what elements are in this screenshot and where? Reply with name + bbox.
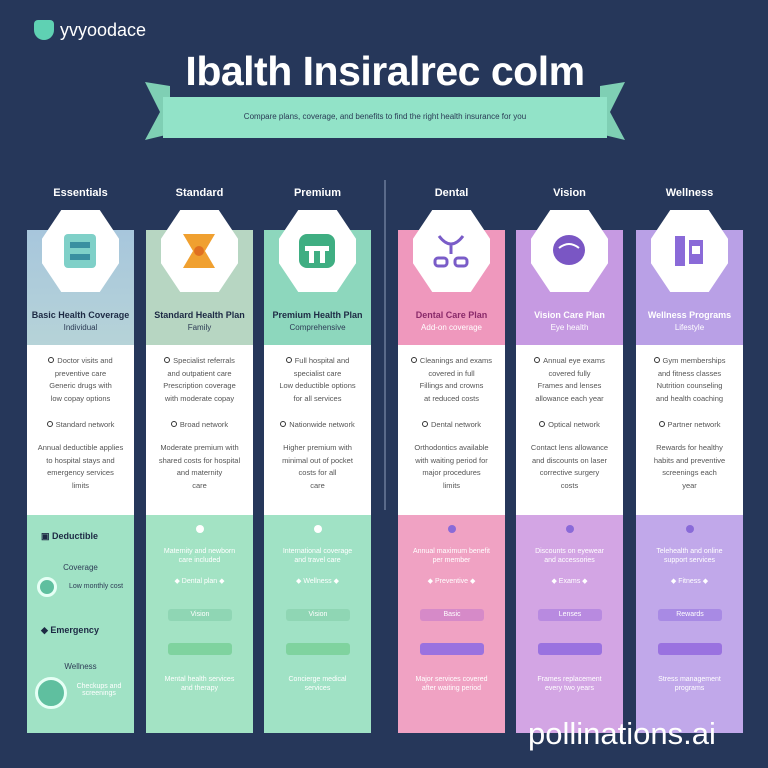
column 5: Discounts on eyewear <box>535 548 604 555</box>
divider <box>384 180 386 510</box>
column 2: Standard Health Plan <box>154 310 245 320</box>
column 1: Coverage <box>63 563 98 572</box>
column 4: covered in full <box>428 368 475 378</box>
column 3: International coverage <box>283 548 352 555</box>
column 5: allowance each year <box>535 394 604 402</box>
column 2: and outpatient care <box>167 368 232 378</box>
column 2: with moderate copay <box>165 394 234 402</box>
column 5: Frames replacement <box>537 676 602 683</box>
column 1: Checkups and screenings <box>77 683 121 697</box>
column 1: Annual deductible applies <box>38 443 123 452</box>
column 6: Wellness Programs <box>648 310 731 320</box>
column 3: Concierge medical <box>288 676 346 683</box>
column 5: corrective surgery <box>540 468 599 477</box>
column 5: and accessories <box>544 557 595 564</box>
column 4: Orthodontics available <box>414 443 489 452</box>
column 5: Annual eye exams <box>543 356 605 365</box>
column 4: Major services covered <box>416 676 487 683</box>
column 2: shared costs for hospital <box>159 456 240 464</box>
column 4: Annual maximum benefit <box>413 548 490 555</box>
column 6: habits and preventive <box>654 456 725 464</box>
column 1: ◆ Emergency <box>41 625 99 635</box>
column 5: covered fully <box>548 368 591 378</box>
column 5 <box>516 187 623 733</box>
column 2: Family <box>188 323 211 332</box>
column 6: screenings each <box>662 468 717 477</box>
column 2: Vision <box>191 611 209 618</box>
column 4: major procedures <box>422 468 481 477</box>
watermark: pollinations.ai <box>528 716 716 751</box>
column 2: Specialist referrals <box>173 356 235 365</box>
column 5: Contact lens allowance <box>531 443 608 452</box>
column 2: Mental health services <box>165 676 234 683</box>
column 6: Gym memberships <box>663 356 725 365</box>
subtitle: Compare plans, coverage, and benefits to find the right health insurance for you <box>244 112 526 121</box>
column 6: Telehealth and online <box>656 548 723 555</box>
column 1: emergency services <box>47 468 114 477</box>
column 4: at reduced costs <box>424 394 479 402</box>
text: Essentials <box>53 187 108 199</box>
column 6: Lifestyle <box>675 323 704 332</box>
column 4: limits <box>443 480 460 490</box>
column 3: care <box>310 480 325 490</box>
column 1: to hospital stays and <box>46 456 115 464</box>
logo <box>34 20 146 40</box>
text: Wellness <box>666 187 713 199</box>
column 4: Dental Care Plan <box>416 310 487 320</box>
text: Dental <box>435 187 468 199</box>
column 4: Dental network <box>431 420 481 429</box>
column 3: minimal out of pocket <box>282 456 353 464</box>
column 2: care included <box>179 557 220 564</box>
column 2: care <box>192 480 207 490</box>
column 5: Vision Care Plan <box>534 310 605 320</box>
column 4: Cleanings and exams <box>420 356 492 365</box>
column 6: programs <box>675 685 704 692</box>
column 3: Comprehensive <box>289 323 346 332</box>
column 6: Partner network <box>668 420 720 429</box>
column 5: Eye health <box>551 323 588 332</box>
column 2: and therapy <box>181 685 218 692</box>
column 6: and health coaching <box>656 394 723 402</box>
column 3: and travel care <box>294 557 341 564</box>
column 2: Prescription coverage <box>163 381 236 390</box>
column 5: Lenses <box>559 611 581 618</box>
column 2 <box>146 187 253 733</box>
column 3 <box>264 187 371 733</box>
text: Vision <box>553 187 586 199</box>
column 4 <box>398 187 505 733</box>
column 1: Individual <box>64 323 97 332</box>
column 3: services <box>305 685 330 692</box>
column 6: support services <box>664 557 715 564</box>
column 6: Nutrition counseling <box>657 381 722 390</box>
column 3: ◆ Wellness ◆ <box>296 578 339 585</box>
column 5: costs <box>561 480 578 490</box>
column 6: year <box>682 480 697 490</box>
column 3: specialist care <box>294 368 341 378</box>
column 1: preventive care <box>55 368 106 378</box>
column 3: for all services <box>294 394 341 402</box>
column 3: Premium Health Plan <box>272 310 363 320</box>
title: Ibalth Insiralrec colm <box>185 48 585 94</box>
column 1: Low monthly cost <box>69 583 123 590</box>
column 2: Maternity and newborn <box>164 548 235 555</box>
column 3: Nationwide network <box>289 420 355 429</box>
ribbon banner <box>145 82 625 140</box>
column 5: Frames and lenses <box>538 381 601 390</box>
column 1 <box>27 187 134 733</box>
column 3: Low deductible options <box>279 381 356 390</box>
column 3: Higher premium with <box>283 443 352 452</box>
column 1: limits <box>72 480 89 490</box>
column 1: low copay options <box>51 394 110 402</box>
text: Premium <box>294 187 341 199</box>
column 1: Standard network <box>56 420 114 429</box>
column 4: Fillings and crowns <box>420 381 483 390</box>
column 5: every two years <box>545 685 594 692</box>
column 6: Rewards for healthy <box>656 443 723 452</box>
column 1: Doctor visits and <box>57 356 113 365</box>
column 6: Stress management <box>658 676 721 683</box>
column 4: per member <box>433 557 470 564</box>
column 1: Basic Health Coverage <box>32 310 129 320</box>
column 2: Broad network <box>180 420 228 429</box>
column 1: Generic drugs with <box>49 381 112 390</box>
column 2: and maternity <box>177 468 222 477</box>
icon: shield <box>34 20 54 40</box>
column 2: ◆ Dental plan ◆ <box>174 578 225 585</box>
column 3: costs for all <box>299 468 336 477</box>
text: Standard <box>176 187 223 199</box>
column 6 <box>636 187 743 733</box>
column 5: Optical network <box>548 420 600 429</box>
column 5: ◆ Exams ◆ <box>551 578 588 585</box>
column 4: Add-on coverage <box>421 323 482 332</box>
column 3: Vision <box>309 611 327 618</box>
column 4: with waiting period for <box>415 456 488 464</box>
column 6: and fitness classes <box>658 368 721 378</box>
column 1: ▣ Deductible <box>41 531 98 541</box>
column 4: ◆ Preventive ◆ <box>428 578 475 585</box>
logo text: yvyoodace <box>60 20 146 40</box>
column 6: Rewards <box>676 611 704 618</box>
column 4: Basic <box>443 611 461 618</box>
column 1: Wellness <box>64 662 97 671</box>
column 6: ◆ Fitness ◆ <box>671 578 708 585</box>
column 4: after waiting period <box>422 685 481 692</box>
column 2: Moderate premium with <box>160 443 239 452</box>
column 3: Full hospital and <box>295 356 349 365</box>
column 5: and discounts on laser <box>532 456 607 464</box>
